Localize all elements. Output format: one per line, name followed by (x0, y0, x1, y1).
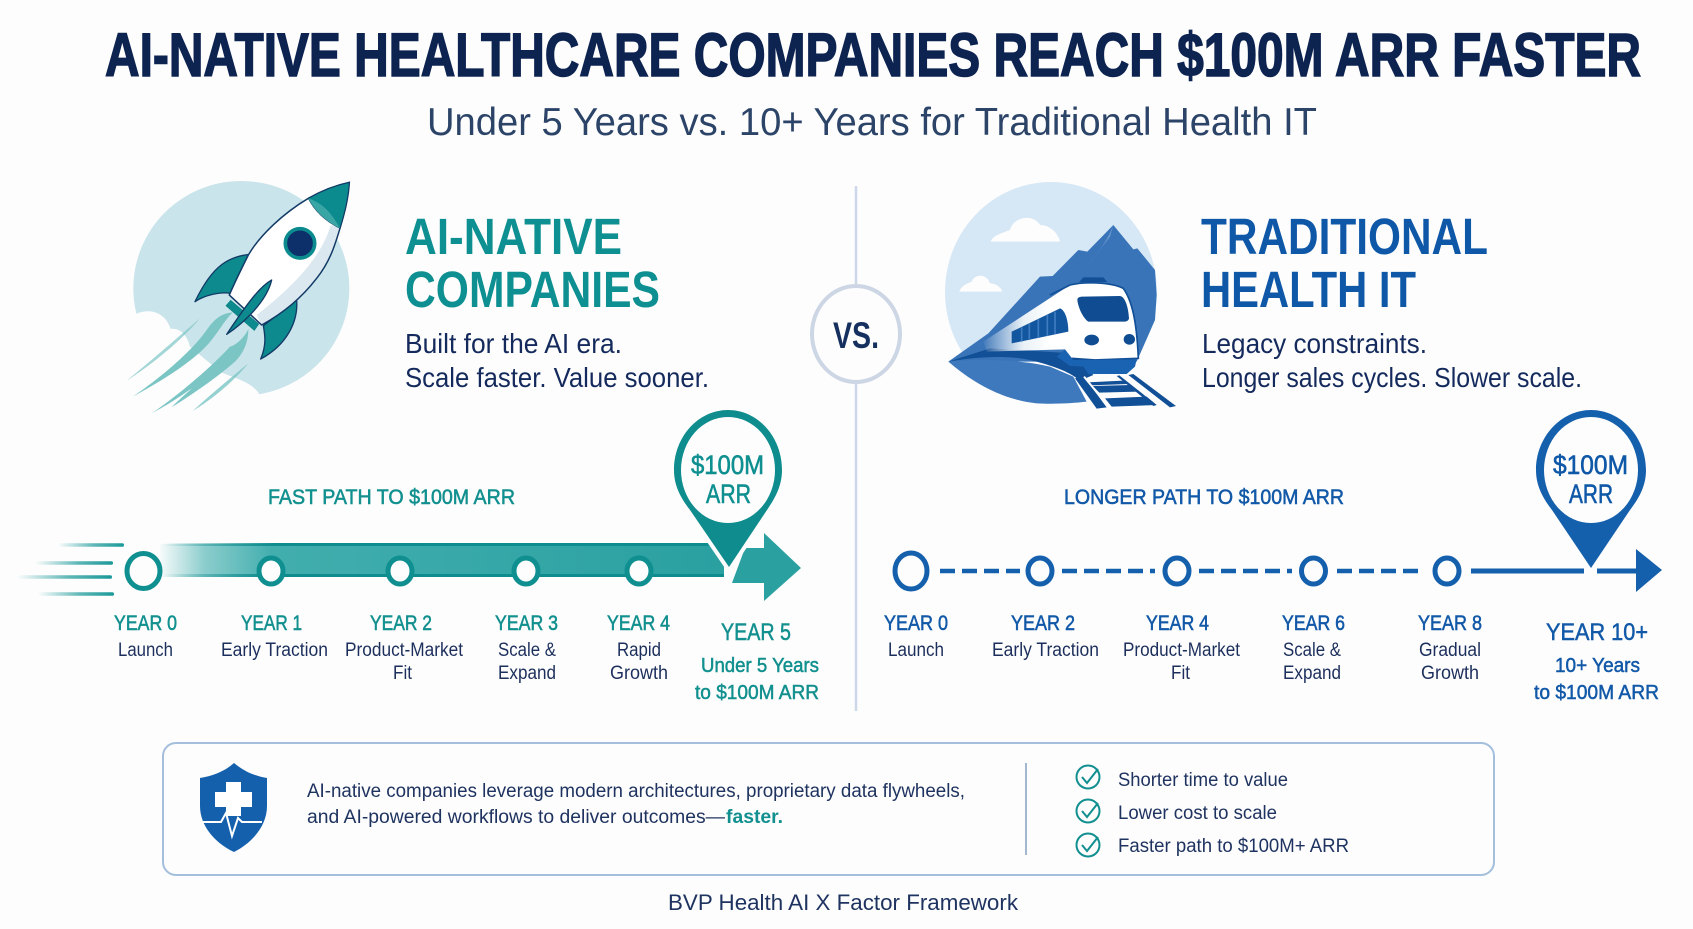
labels: traditional milestones: YEAR 8 (1418, 612, 1482, 635)
checklist: Shorter time to value (1118, 770, 1288, 791)
pin: $100M ARR: $100M (1553, 450, 1628, 480)
pin: $100M ARR (1536, 410, 1646, 568)
labels: traditional milestones: Scale & (1283, 640, 1341, 661)
text: traditional description: Longer sales cycles. Slower scale. (1202, 362, 1582, 393)
text: AI-native description: Built for the AI era. (405, 328, 622, 359)
arrow bar (160, 533, 801, 601)
heading: traditional health IT: TRADITIONAL (1201, 208, 1488, 265)
labels: traditional milestones: Early Traction (992, 640, 1099, 661)
milestones (895, 553, 1459, 589)
callout: year 10+: to $100M ARR (1534, 682, 1659, 704)
checklist (1076, 766, 1349, 857)
labels: traditional milestones: YEAR 6 (1282, 612, 1345, 635)
icon: medical shield (200, 763, 267, 852)
dashed path (940, 569, 1425, 573)
pin: $100M ARR: ARR (1569, 479, 1613, 509)
callout: year 10+ (1534, 619, 1659, 704)
labels: AI-native milestones: Expand (498, 663, 556, 684)
labels: AI-native milestones: Launch (118, 640, 173, 661)
labels: AI-native milestones: YEAR 4 (607, 612, 670, 635)
divider (855, 186, 857, 711)
text: traditional description: Legacy constraints. (1202, 328, 1427, 359)
labels: traditional milestones: YEAR 2 (1011, 612, 1075, 635)
badge: VS. (812, 286, 900, 382)
heading: AI-native companies: AI-NATIVE (405, 208, 622, 265)
checklist: Lower cost to scale (1118, 803, 1277, 824)
callout: year 5: to $100M ARR (695, 682, 819, 704)
timeline: AI-native fast path (17, 410, 801, 601)
labels: AI-native milestones: YEAR 2 (370, 612, 432, 635)
speed lines (17, 543, 124, 596)
milestones (127, 554, 651, 588)
callout: year 5 (695, 619, 819, 704)
labels: traditional milestones: Growth (1421, 663, 1479, 684)
label: longer path: LONGER PATH TO $100M ARR (1064, 486, 1344, 509)
pin: $100M ARR (674, 410, 782, 567)
heading: traditional health IT (1201, 208, 1488, 318)
labels: traditional milestones: Fit (1171, 663, 1191, 684)
text: summary statement: faster. (726, 807, 783, 828)
labels: traditional milestones: Expand (1283, 663, 1341, 684)
panel: summary (163, 743, 1494, 875)
icon: train (940, 182, 1183, 420)
callout: year 10+: 10+ Years (1555, 655, 1640, 677)
heading: traditional health IT: HEALTH IT (1201, 261, 1416, 318)
labels: traditional milestones: YEAR 0 (884, 612, 948, 635)
labels: AI-native milestones: Scale & (498, 640, 556, 661)
pin: $100M ARR: ARR (706, 479, 751, 509)
callout: year 5: Under 5 Years (701, 655, 819, 677)
callout: year 5: YEAR 5 (721, 619, 791, 646)
labels: AI-native milestones: YEAR 1 (241, 612, 302, 635)
labels: AI-native milestones: Growth (610, 663, 668, 684)
labels: AI-native milestones: Product-Market (345, 640, 464, 661)
labels: AI-native milestones: Rapid (617, 640, 661, 661)
solid arrow (1471, 549, 1662, 592)
text: traditional description (1202, 328, 1582, 393)
timeline: traditional longer path (895, 410, 1662, 592)
subtitle: Under 5 Years vs. 10+ Years for Traditional Health IT (427, 101, 1317, 144)
pin: $100M ARR: $100M (691, 450, 764, 480)
text: summary statement: and AI-powered workflows to deliver outcomes— (307, 807, 725, 828)
labels: traditional milestones: Product-Market (1123, 640, 1241, 661)
text: AI-native description: Scale faster. Value sooner. (405, 362, 709, 393)
labels: AI-native milestones: YEAR 0 (114, 612, 177, 635)
label: fast path: FAST PATH TO $100M ARR (268, 486, 515, 509)
labels: AI-native milestones: Fit (393, 663, 413, 684)
checklist: Faster path to $100M+ ARR (1118, 836, 1349, 857)
text: summary statement: AI-native companies leverage modern architectures, proprietary data flywheels, (307, 781, 965, 802)
badge: VS.: VS. (833, 315, 879, 356)
labels: traditional milestones: YEAR 4 (1146, 612, 1209, 635)
icon: rocket (127, 181, 349, 415)
labels: AI-native milestones: Early Traction (221, 640, 328, 661)
text: summary statement (307, 781, 965, 828)
callout: year 10+: YEAR 10+ (1546, 619, 1648, 646)
heading: AI-native companies (405, 208, 660, 318)
footer: source: BVP Health AI X Factor Framework (668, 890, 1019, 915)
labels: traditional milestones: Launch (888, 640, 944, 661)
labels: AI-native milestones: YEAR 3 (495, 612, 558, 635)
text: AI-native description (405, 328, 709, 393)
labels: AI-native milestones (114, 612, 670, 684)
labels: traditional milestones: Gradual (1419, 640, 1481, 661)
heading: AI-native companies: COMPANIES (405, 261, 660, 318)
labels: traditional milestones (884, 612, 1482, 684)
